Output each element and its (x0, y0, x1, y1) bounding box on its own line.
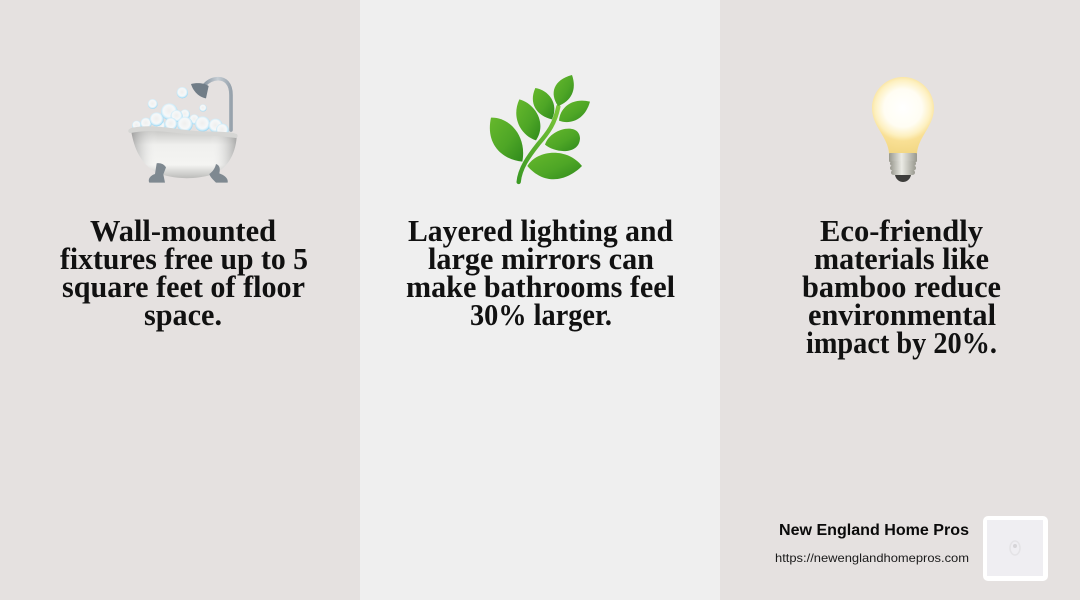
heading: eco-friendly bamboo (802, 213, 1001, 360)
icon: light bulb (872, 77, 934, 182)
heading: layered lighting and mirrors: large mirrors can (428, 241, 654, 276)
panel: eco-friendly materials (720, 0, 1080, 600)
heading: eco-friendly bamboo: materials like (814, 241, 989, 276)
panel: wall-mounted fixtures (0, 0, 360, 600)
icon: bathtub (128, 79, 238, 183)
heading: fixtures free floor space: Wall-mounted (90, 213, 276, 248)
heading: fixtures free floor space: square feet of floor (62, 269, 305, 304)
panel: layered lighting (360, 0, 720, 600)
heading: layered lighting and mirrors: Layered lighting and (408, 213, 673, 248)
brand name: New England Home Pros (779, 522, 969, 539)
icon: herb sprig (490, 75, 590, 182)
heading: eco-friendly bamboo: impact by 20%. (806, 325, 997, 360)
brand url: https://newenglandhomepros.com (775, 551, 969, 565)
heading: layered lighting and mirrors: make bathrooms feel (406, 269, 675, 304)
logo tile (983, 516, 1048, 581)
heading: eco-friendly bamboo: Eco-friendly (820, 213, 983, 248)
heading: fixtures free floor space: fixtures free up to 5 (60, 241, 308, 276)
heading: eco-friendly bamboo: environmental (808, 297, 996, 332)
heading: fixtures free floor space (60, 213, 308, 332)
heading: layered lighting and mirrors (406, 213, 675, 332)
heading: fixtures free floor space: space. (144, 297, 222, 332)
heading: eco-friendly bamboo: bamboo reduce (802, 269, 1001, 304)
heading: layered lighting and mirrors: 30% larger. (470, 297, 612, 332)
